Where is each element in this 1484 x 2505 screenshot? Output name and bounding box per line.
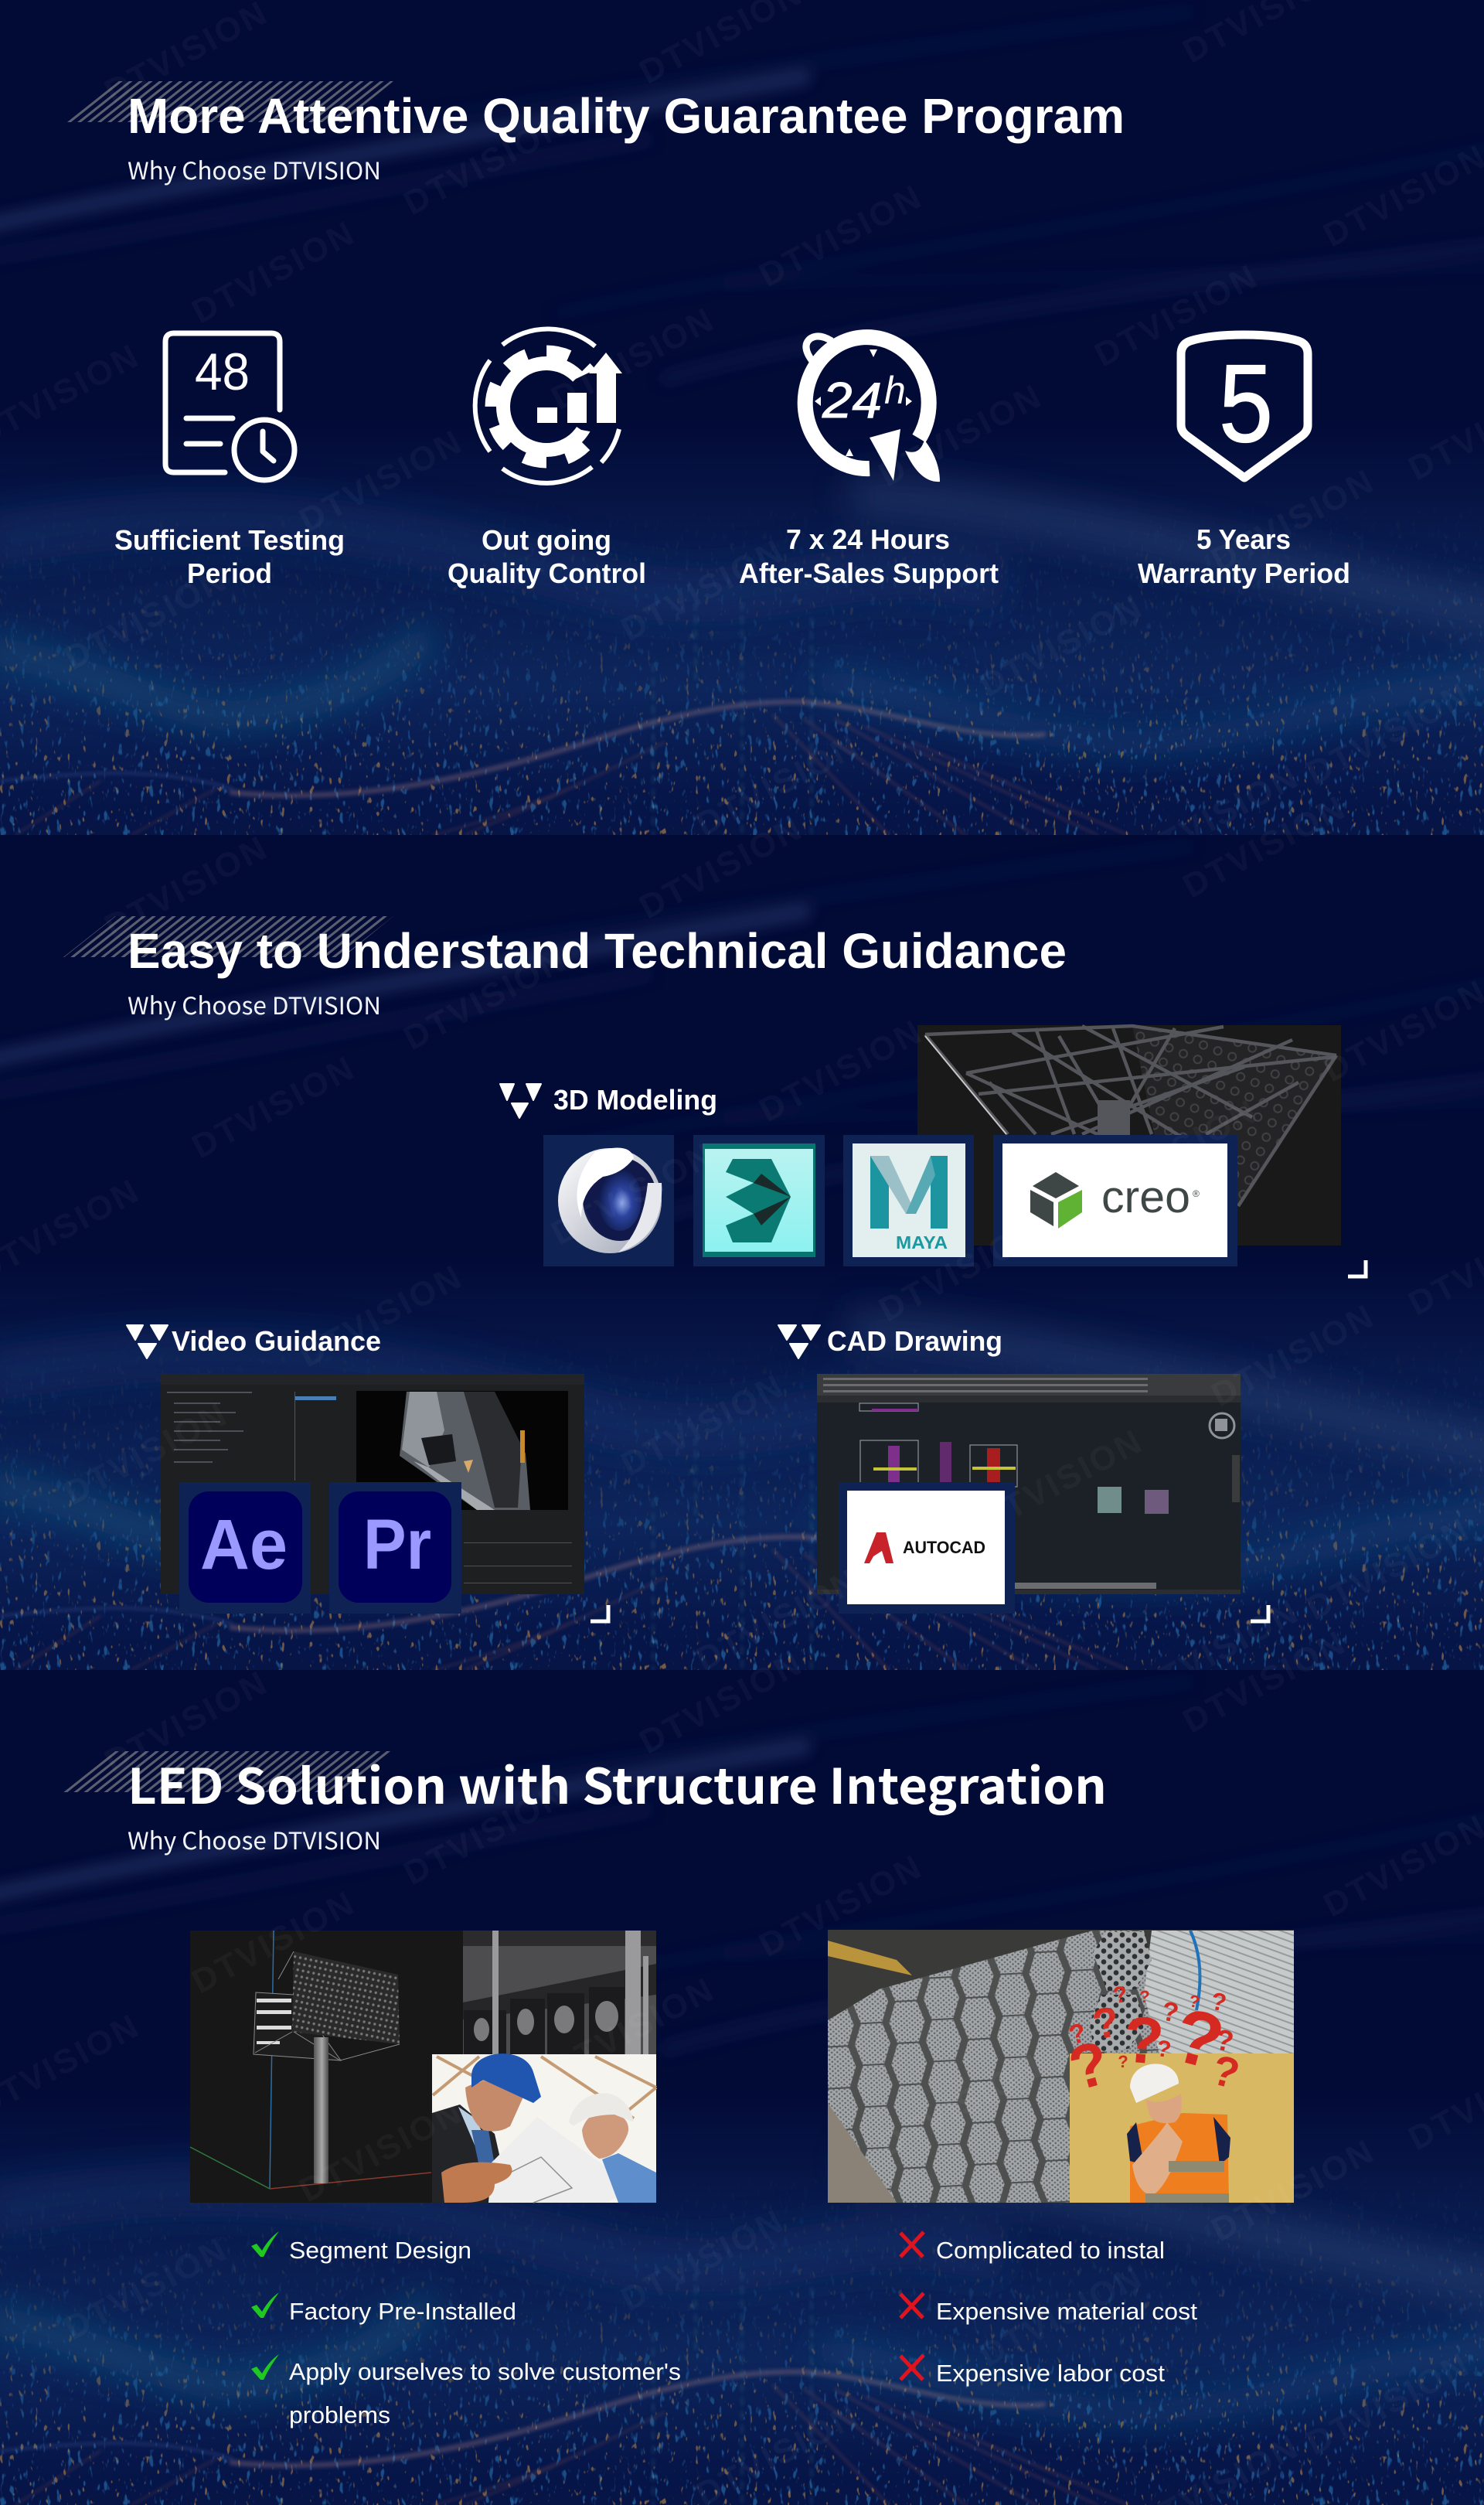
- logo card: Premiere Pro: Pr: [363, 1505, 431, 1584]
- logo card: Cinema 4D: [543, 1135, 674, 1266]
- image: integrated LED structure composite: [190, 1931, 656, 2203]
- text: factory pre-installed: Factory Pre-Installed: [289, 2298, 516, 2325]
- image: traditional steel pipes composite: [828, 1930, 1294, 2203]
- icon: check: [251, 2231, 279, 2257]
- watermarks: DTVISION: [973, 587, 1149, 704]
- watermarks: DTVISION: [1088, 1092, 1264, 1209]
- watermarks: DTVISION: [58, 560, 234, 677]
- watermarks: DTVISION: [1176, 788, 1353, 905]
- panel: technical guidance: [0, 788, 1484, 1709]
- image: traditional steel pipes composite: ?: [1066, 2017, 1089, 2050]
- watermarks: DTVISION: [1300, 1510, 1476, 1627]
- watermarks: DTVISION: [186, 1883, 362, 2001]
- section icon and label: video guidance: Video Guidance: [172, 1325, 381, 1357]
- label: sufficient testing period: [114, 524, 345, 589]
- watermarks: DTVISION: [1300, 2345, 1476, 2462]
- watermarks: DTVISION: [753, 177, 929, 295]
- image: traditional steel pipes composite: ?: [1165, 1991, 1233, 2087]
- logo card: Maya: [843, 1135, 974, 1266]
- image: traditional steel pipes composite: ?: [1188, 1991, 1201, 2012]
- title: LED Solution with Structure Integration: [128, 1748, 1107, 1818]
- logo card: Maya: MAYA: [896, 1232, 948, 1252]
- logo card: Premiere Pro: [329, 1482, 461, 1614]
- section icon and label: 3D modeling: [500, 1084, 717, 1118]
- list: disadvantages: [900, 2232, 1197, 2387]
- watermarks: DTVISION: [614, 531, 791, 649]
- image: traditional steel pipes composite: ?: [1120, 2002, 1166, 2079]
- label: sufficient testing period: Period: [187, 557, 272, 589]
- icon: cross: [900, 2293, 924, 2318]
- watermarks: DTVISION: [293, 2092, 469, 2210]
- watermarks: DTVISION: [293, 422, 469, 540]
- icon: cross: [900, 2355, 924, 2380]
- watermarks: DTVISION: [98, 828, 274, 946]
- label: outgoing quality control: [448, 524, 646, 589]
- watermarks: DTVISION: [186, 213, 362, 331]
- watermarks: DTVISION: [973, 1422, 1149, 1539]
- icon: cross: [900, 2232, 924, 2257]
- watermarks: DTVISION: [397, 1775, 574, 1893]
- icon: check: [251, 2354, 279, 2380]
- watermarks: DTVISION: [1088, 257, 1264, 374]
- watermarks: DTVISION: [614, 2201, 791, 2319]
- watermarks: DTVISION: [1300, 675, 1476, 792]
- watermarks: DTVISION: [293, 1257, 469, 1375]
- watermarks: DTVISION: [873, 1212, 1049, 1329]
- image: 3D steel frame render: [917, 1025, 1341, 1246]
- image: video editor screenshot: [161, 1374, 584, 1594]
- image: traditional steel pipes composite: ?: [1155, 2036, 1173, 2063]
- watermarks: DTVISION: [1176, 1623, 1353, 1740]
- logo card: AutoCAD: AUTOCAD: [903, 1538, 985, 1557]
- logo card: Creo: [993, 1135, 1237, 1266]
- section icon and label: CAD drawing: CAD Drawing: [827, 1325, 1002, 1357]
- label: warranty period: [1138, 523, 1350, 589]
- text: expensive labor cost: Expensive labor cost: [936, 2360, 1165, 2387]
- watermarks: DTVISION: [98, 1663, 274, 1781]
- subtitle: Why Choose DTVISION: [128, 987, 381, 1021]
- panel: LED solution with structure integration: [0, 1623, 1484, 2505]
- logo card: Creo: ®: [1193, 1188, 1200, 1199]
- subtitle: Why Choose DTVISION: [128, 152, 381, 186]
- image: traditional steel pipes composite: ?: [1139, 1987, 1150, 2006]
- image: traditional steel pipes composite: ?: [1062, 2027, 1116, 2104]
- watermarks: DTVISION: [753, 1012, 929, 1130]
- watermarks: DTVISION: [186, 1048, 362, 1166]
- watermarks: DTVISION: [633, 1644, 809, 1761]
- subtitle: Why Choose DTVISION: [128, 1822, 381, 1856]
- label: after-sales support: After-Sales Support: [739, 557, 999, 589]
- text: complicated to install: Complicated to instal: [936, 2237, 1165, 2264]
- watermarks: DTVISION: [545, 1970, 721, 2088]
- watermarks: DTVISION: [545, 300, 721, 418]
- icon: testing period document and clock: [165, 333, 294, 480]
- icon: check: [251, 2292, 279, 2318]
- text: apply ourselves: problems: [289, 2401, 390, 2428]
- label: warranty period: 5 Years: [1196, 523, 1291, 555]
- image: traditional steel pipes composite: ?: [1159, 1996, 1181, 2029]
- logo card: After Effects: Ae: [200, 1505, 288, 1584]
- watermarks: DTVISION: [689, 1561, 866, 1679]
- logo card: Creo: creo: [1101, 1172, 1190, 1222]
- text: segment design: Segment Design: [289, 2237, 471, 2264]
- text: apply ourselves: [289, 2358, 681, 2428]
- watermarks: [0, 0, 1484, 874]
- corner bracket: [1251, 1605, 1268, 1621]
- watermarks: DTVISION: [1205, 2132, 1381, 2249]
- icon: 24 hour clock: 24: [822, 372, 882, 428]
- watermarks: DTVISION: [1129, 757, 1305, 874]
- watermarks: DTVISION: [1205, 1297, 1381, 1414]
- icon: gear with rising bars: [475, 329, 622, 483]
- label: warranty period: Warranty Period: [1138, 557, 1350, 589]
- label: outgoing quality control: Out going: [482, 524, 611, 556]
- image: traditional steel pipes composite: ?: [1213, 2023, 1236, 2059]
- image: traditional steel pipes composite: ?: [1209, 1987, 1229, 2017]
- label: sufficient testing period: Sufficient Testing: [114, 524, 345, 556]
- watermarks: DTVISION: [1205, 462, 1381, 579]
- title: Easy to Understand Technical Guidance: [128, 923, 1067, 979]
- list: advantages: [251, 2231, 681, 2428]
- logo card: After Effects: [179, 1482, 311, 1614]
- panel: quality guarantee: [0, 0, 1484, 874]
- watermarks: DTVISION: [614, 1366, 791, 1484]
- heading stripes: [63, 81, 393, 122]
- image: CAD software screenshot: [817, 1374, 1241, 1594]
- image: traditional steel pipes composite: ?: [1118, 2052, 1128, 2071]
- watermarks: DTVISION: [689, 726, 866, 844]
- heading stripes: [63, 1751, 393, 1792]
- corner bracket: [591, 1605, 608, 1621]
- watermarks: DTVISION: [545, 1135, 721, 1252]
- watermarks: [0, 1623, 1484, 2505]
- watermarks: [0, 788, 1484, 1709]
- text: apply ourselves: Apply ourselves to solve customer's: [289, 2358, 681, 2385]
- image: traditional steel pipes composite: ?: [1111, 1982, 1129, 2009]
- corner bracket: [1348, 1260, 1366, 1276]
- watermarks: DTVISION: [753, 1847, 929, 1965]
- icon: testing period document and clock: 48: [195, 343, 250, 401]
- watermarks: DTVISION: [58, 2230, 234, 2347]
- watermarks: DTVISION: [397, 940, 574, 1058]
- label: outgoing quality control: Quality Control: [448, 557, 646, 589]
- logo card: 3ds Max: [693, 1135, 825, 1266]
- image: traditional steel pipes composite: ?: [1207, 2045, 1244, 2098]
- label: after-sales support: 7 x 24 Hours: [786, 523, 950, 555]
- icon: 24 hour clock: [805, 336, 940, 482]
- logo card: AutoCAD: [839, 1482, 1015, 1614]
- watermarks: DTVISION: [633, 809, 809, 926]
- watermarks: DTVISION: [1129, 1592, 1305, 1709]
- watermarks: DTVISION: [1088, 1927, 1264, 2044]
- title: More Attentive Quality Guarantee Program: [128, 88, 1125, 144]
- watermarks: DTVISION: [873, 377, 1049, 494]
- icon: 24 hour clock: h: [884, 369, 906, 412]
- watermarks: DTVISION: [973, 2257, 1149, 2374]
- heading stripes: [63, 916, 393, 957]
- watermarks: DTVISION: [397, 105, 574, 223]
- section icon and label: 3D modeling: 3D Modeling: [553, 1084, 717, 1116]
- text: expensive material cost: Expensive material cost: [936, 2298, 1197, 2325]
- icon: five year shield: [1181, 335, 1308, 478]
- icon: five year shield: 5: [1219, 343, 1273, 465]
- watermarks: DTVISION: [873, 2047, 1049, 2164]
- watermarks: DTVISION: [58, 1395, 234, 1512]
- label: after-sales support: [739, 523, 999, 589]
- image: traditional steel pipes composite: ?: [1089, 1997, 1123, 2049]
